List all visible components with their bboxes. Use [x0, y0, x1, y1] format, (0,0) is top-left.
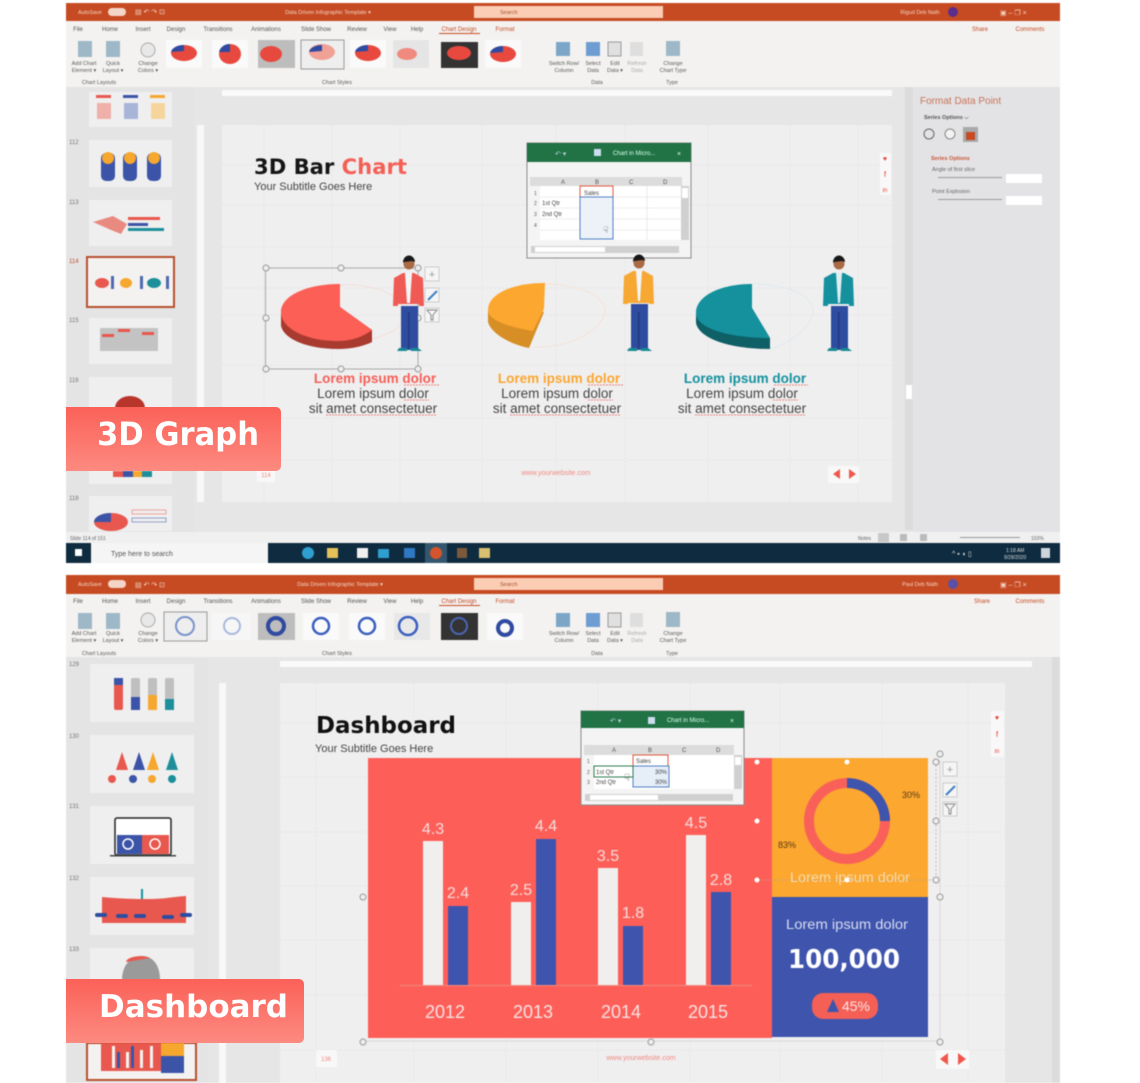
donut panel: 30%	[902, 790, 920, 800]
excel data window: 1st Qtr	[542, 201, 560, 207]
ribbon: Share	[974, 599, 991, 605]
ribbon: Quick	[106, 61, 120, 67]
title bar: ▤ ↶ ↷ ⊡	[135, 582, 165, 589]
ruler top	[280, 661, 1032, 667]
bars 2013: 4.4	[535, 818, 557, 835]
donut panel: 83%	[778, 840, 796, 850]
ribbon: Column	[555, 68, 573, 74]
slide thumbnails: 133	[69, 947, 80, 953]
ribbon: Add Chart	[72, 631, 97, 637]
status bar: Slide 114 of 151	[70, 536, 106, 542]
ruler left	[197, 125, 204, 502]
excel data window: 2	[534, 201, 537, 207]
person: red jacket	[393, 255, 424, 351]
title bar: ▣ – ❐ ×	[1000, 581, 1027, 589]
ribbon	[66, 21, 1060, 87]
excel data window: ×	[730, 718, 734, 725]
title bar: Search	[500, 10, 517, 16]
excel data window: B	[595, 180, 599, 186]
slide title: 3D Bar Chart: 3D Bar Chart	[254, 155, 407, 179]
ribbon: Chart Layouts	[82, 651, 116, 657]
badge: Dashboard: Dashboard	[99, 989, 288, 1025]
ribbon: Type	[666, 651, 678, 657]
ribbon: Animations	[251, 599, 281, 605]
ribbon: Help	[411, 27, 424, 33]
ruler top	[222, 90, 892, 96]
format data point pane: Format Data Point	[920, 96, 1001, 107]
ribbon: Chart Design	[441, 27, 477, 33]
excel data window: A	[612, 748, 616, 754]
social icons	[991, 711, 1004, 757]
social icons: f	[884, 170, 887, 179]
ribbon: Format	[495, 599, 515, 605]
ribbon: Switch Row/	[549, 631, 580, 637]
KPI panel: 100,000	[788, 945, 900, 975]
excel data window: ☟	[624, 773, 630, 784]
social icons: ♥	[883, 156, 887, 163]
slide thumbnails: 131	[69, 804, 80, 810]
title bar: AutoSave	[78, 582, 102, 588]
excel data window: C	[629, 180, 634, 186]
format data point pane: Angle of first slice	[932, 167, 975, 173]
title bar: Data Driven Infographic Template ▾	[297, 582, 383, 588]
bars 2015: 4.5	[685, 815, 707, 832]
ribbon: Refresh	[627, 61, 647, 67]
windows taskbar: 9/28/2020	[1004, 555, 1026, 561]
KPI panel	[772, 897, 928, 1037]
ribbon: Element ▾	[72, 68, 96, 74]
badge: Dashboard	[66, 979, 304, 1043]
excel data window: D	[716, 748, 721, 754]
ribbon: Home	[102, 27, 119, 33]
caption: teal: Lorem ipsum dolor	[684, 371, 807, 386]
ribbon: Transitions	[203, 599, 233, 605]
ribbon: Edit	[610, 631, 620, 637]
screenshot: dashboard PowerPoint window	[66, 575, 1060, 1083]
bars 2014	[597, 848, 644, 985]
slide thumbnails: 130	[69, 734, 80, 740]
excel data window: 2nd Qtr	[542, 212, 562, 218]
bar chart panel	[368, 758, 772, 1038]
excel data window: ↶ ▾	[555, 151, 567, 158]
format data point pane	[914, 87, 1060, 532]
ribbon: Review	[347, 27, 367, 33]
title bar: Paul Deb Nath	[902, 582, 938, 588]
title bar: Rigud Deb Nath	[900, 10, 940, 16]
slide panel	[280, 683, 1005, 1083]
person: orange jacket	[623, 254, 654, 351]
ribbon: Chart Styles	[322, 651, 352, 657]
donut panel: Lorem ipsum dolor	[790, 869, 910, 885]
bars 2012: 4.3	[422, 821, 444, 838]
ribbon: Add Chart	[72, 61, 97, 67]
ribbon: Colors ▾	[138, 68, 158, 74]
caption: orange: Lorem ipsum dolor	[501, 386, 613, 401]
ribbon: Layout ▾	[103, 68, 124, 74]
ribbon: Edit	[610, 61, 620, 67]
ribbon: Switch Row/	[549, 61, 580, 67]
excel data window	[527, 143, 691, 258]
ribbon: Data	[587, 638, 600, 644]
year axis labels: 2013	[513, 1002, 553, 1022]
format data point pane: Series Options ⌵	[924, 115, 969, 121]
social icons	[880, 153, 891, 195]
title bar: ▤ ↶ ↷ ⊡	[135, 9, 165, 16]
title bar: ▣ – ❐ ×	[1000, 9, 1027, 17]
excel data window	[581, 711, 744, 805]
slide title: Dashboard: Dashboard	[316, 713, 456, 739]
ribbon: Review	[347, 599, 367, 605]
status bar: Notes	[858, 536, 872, 542]
caption: red: sit amet consectetuer	[309, 401, 438, 416]
badge: 3D Graph: 3D Graph	[97, 415, 259, 453]
ribbon: Insert	[135, 27, 151, 33]
ribbon: View	[384, 27, 397, 33]
format data point pane: Point Explosion	[932, 189, 970, 195]
excel data window: 30%	[655, 780, 668, 786]
bars 2015: 2.8	[710, 872, 732, 889]
chart tools icons	[425, 267, 439, 322]
excel data window: Sales	[636, 759, 651, 765]
page number box	[316, 1050, 337, 1067]
excel data window: 1st Qtr	[596, 770, 614, 776]
right scrollbar	[1052, 657, 1060, 1083]
ribbon: Change	[138, 631, 158, 637]
excel data window: 2	[587, 770, 590, 776]
ribbon: Comments	[1015, 599, 1045, 605]
percent pill	[812, 993, 878, 1019]
title bar: Data Driven Infographic Template ▾	[285, 10, 371, 16]
bars 2015	[685, 815, 732, 985]
caption: teal	[678, 371, 808, 416]
bars 2013	[510, 818, 557, 985]
caption: teal: Lorem ipsum dolor	[686, 386, 798, 401]
ribbon: Column	[555, 638, 573, 644]
caption: red: Lorem ipsum dolor	[314, 371, 437, 386]
ribbon: Colors ▾	[138, 638, 158, 644]
slide thumbnails: 116	[69, 378, 79, 384]
ribbon: Select	[585, 61, 601, 67]
ribbon: Chart Design	[441, 599, 477, 605]
status bar	[66, 532, 1060, 543]
chart selection handles	[360, 751, 943, 1045]
title bar	[66, 575, 1060, 594]
excel data window: D	[663, 180, 668, 186]
chart tools icons	[943, 762, 957, 816]
ruler left	[219, 683, 226, 1083]
bars 2012	[422, 821, 469, 985]
excel data window: 2nd Qtr	[596, 780, 616, 786]
donut panel	[772, 758, 928, 897]
badge: 3D Graph	[66, 407, 281, 471]
ribbon: File	[73, 599, 83, 605]
excel data window: 3	[587, 780, 590, 786]
ribbon: Refresh	[627, 631, 647, 637]
excel data window: ↶ ▾	[610, 718, 622, 725]
slide thumbnails: 113	[69, 200, 79, 206]
ribbon: Slide Show	[301, 27, 332, 33]
windows taskbar: ^ ▪ ◖ ▯	[952, 551, 972, 558]
navigation arrows	[828, 466, 859, 483]
slide thumbnails	[66, 657, 208, 1083]
title bar: Search	[500, 582, 517, 588]
ribbon: Chart Type	[660, 68, 686, 74]
ribbon: Data	[631, 68, 644, 74]
slide thumbnails: 118	[69, 496, 79, 502]
excel data window: 3	[534, 212, 537, 218]
excel data window: B	[648, 748, 652, 754]
slide panel	[222, 125, 892, 502]
ribbon: Help	[411, 599, 424, 605]
scrollbars	[905, 87, 913, 530]
slide thumbnails: 114	[69, 259, 79, 265]
ribbon: Animations	[251, 27, 281, 33]
social icons: in	[883, 188, 887, 194]
ribbon: Data	[591, 651, 604, 657]
ribbon: Comments	[1015, 27, 1045, 33]
bars 2012: 2.4	[447, 885, 469, 902]
excel data window: Sales	[584, 191, 599, 197]
page number box: 136	[321, 1057, 332, 1063]
ribbon: Transitions	[203, 27, 233, 33]
year axis labels: 2012	[425, 1002, 465, 1022]
caption: red	[309, 371, 439, 416]
website link: www.yourwebsite.com	[520, 470, 591, 477]
excel data window: 4	[534, 223, 537, 229]
social icons: in	[995, 749, 999, 755]
ribbon: View	[384, 599, 397, 605]
status bar: 103%	[1031, 536, 1044, 542]
caption: red: Lorem ipsum dolor	[317, 386, 429, 401]
ribbon: Chart Layouts	[82, 80, 116, 86]
caption: orange	[493, 371, 623, 416]
ribbon: Change	[663, 631, 683, 637]
format data point pane: Series Options	[931, 156, 970, 162]
ribbon: Home	[102, 599, 119, 605]
windows taskbar	[66, 543, 1060, 563]
ribbon: Change	[138, 61, 158, 67]
windows taskbar: Type here to search	[111, 551, 173, 558]
caption: orange: sit amet consectetuer	[493, 401, 622, 416]
website link: www.yourwebsite.com	[605, 1055, 676, 1062]
ribbon: Data	[587, 68, 600, 74]
pie chart: red	[281, 284, 405, 349]
year axis labels: 2014	[601, 1002, 641, 1022]
bars 2014: 3.5	[597, 848, 619, 865]
slide thumbnails: 115	[69, 318, 79, 324]
ribbon: Data	[631, 638, 644, 644]
subtitle: Your Subtitle Goes Here	[254, 181, 372, 193]
pie chart: orange	[488, 283, 605, 348]
social icons: f	[996, 730, 999, 739]
bars 2014: 1.8	[622, 905, 644, 922]
ribbon: Data ▾	[607, 68, 623, 74]
excel data window: A	[561, 180, 565, 186]
ribbon: Design	[167, 27, 185, 33]
chart tools icons: +	[429, 269, 435, 281]
donut chart	[809, 783, 885, 859]
chart tools icons: +	[947, 764, 953, 776]
ribbon: File	[73, 27, 83, 33]
slide thumbnails: 129	[69, 662, 80, 668]
caption: teal: sit amet consectetuer	[678, 401, 807, 416]
excel data window: ☟	[603, 225, 608, 235]
page number box: 114	[261, 473, 271, 479]
ribbon: Data	[591, 80, 604, 86]
windows taskbar: 1:18 AM	[1006, 548, 1024, 554]
ribbon: Chart Styles	[322, 80, 352, 86]
ribbon: Insert	[135, 599, 151, 605]
screenshot: 3D graph PowerPoint window	[66, 3, 1060, 563]
ribbon: Format	[495, 27, 515, 33]
KPI panel: Lorem ipsum dolor	[786, 916, 908, 932]
ribbon: Design	[167, 599, 185, 605]
ribbon: Element ▾	[72, 638, 96, 644]
slide thumbnails: 132	[69, 876, 80, 882]
year axis labels	[425, 1002, 728, 1022]
caption: orange: Lorem ipsum dolor	[498, 371, 621, 386]
percent pill: 45%	[842, 998, 870, 1014]
ribbon: Select	[585, 631, 601, 637]
ribbon: Quick	[106, 631, 120, 637]
page number box	[257, 468, 275, 482]
ribbon: Slide Show	[301, 599, 332, 605]
ribbon: Chart Type	[660, 638, 686, 644]
title bar: AutoSave	[78, 10, 102, 16]
excel data window: ×	[677, 151, 681, 158]
slide thumbnails: 112	[69, 140, 79, 146]
ribbon: Share	[972, 27, 989, 33]
ribbon: Data ▾	[607, 638, 623, 644]
ribbon	[66, 594, 1060, 657]
excel data window: 1	[534, 191, 537, 197]
slide thumbnails	[66, 87, 194, 543]
excel data window: Chart in Micro...	[613, 151, 656, 157]
excel data window: 1	[587, 759, 590, 765]
pie chart: teal	[696, 284, 813, 349]
ribbon: Type	[666, 80, 678, 86]
social icons: ♥	[995, 715, 999, 722]
chart selection frame	[263, 265, 421, 372]
title bar	[66, 3, 1060, 21]
workspace background	[66, 87, 1060, 543]
person: teal jacket	[823, 255, 854, 351]
excel data window: 30%	[655, 770, 668, 776]
workspace background	[66, 657, 1060, 1083]
ribbon: Change	[663, 61, 683, 67]
ribbon: Layout ▾	[103, 638, 124, 644]
year axis labels: 2015	[688, 1002, 728, 1022]
navigation arrows	[936, 1050, 969, 1069]
bars 2013: 2.5	[510, 882, 532, 899]
excel data window: Chart in Micro...	[667, 718, 710, 724]
excel data window: C	[682, 748, 687, 754]
subtitle: Your Subtitle Goes Here	[315, 743, 433, 755]
